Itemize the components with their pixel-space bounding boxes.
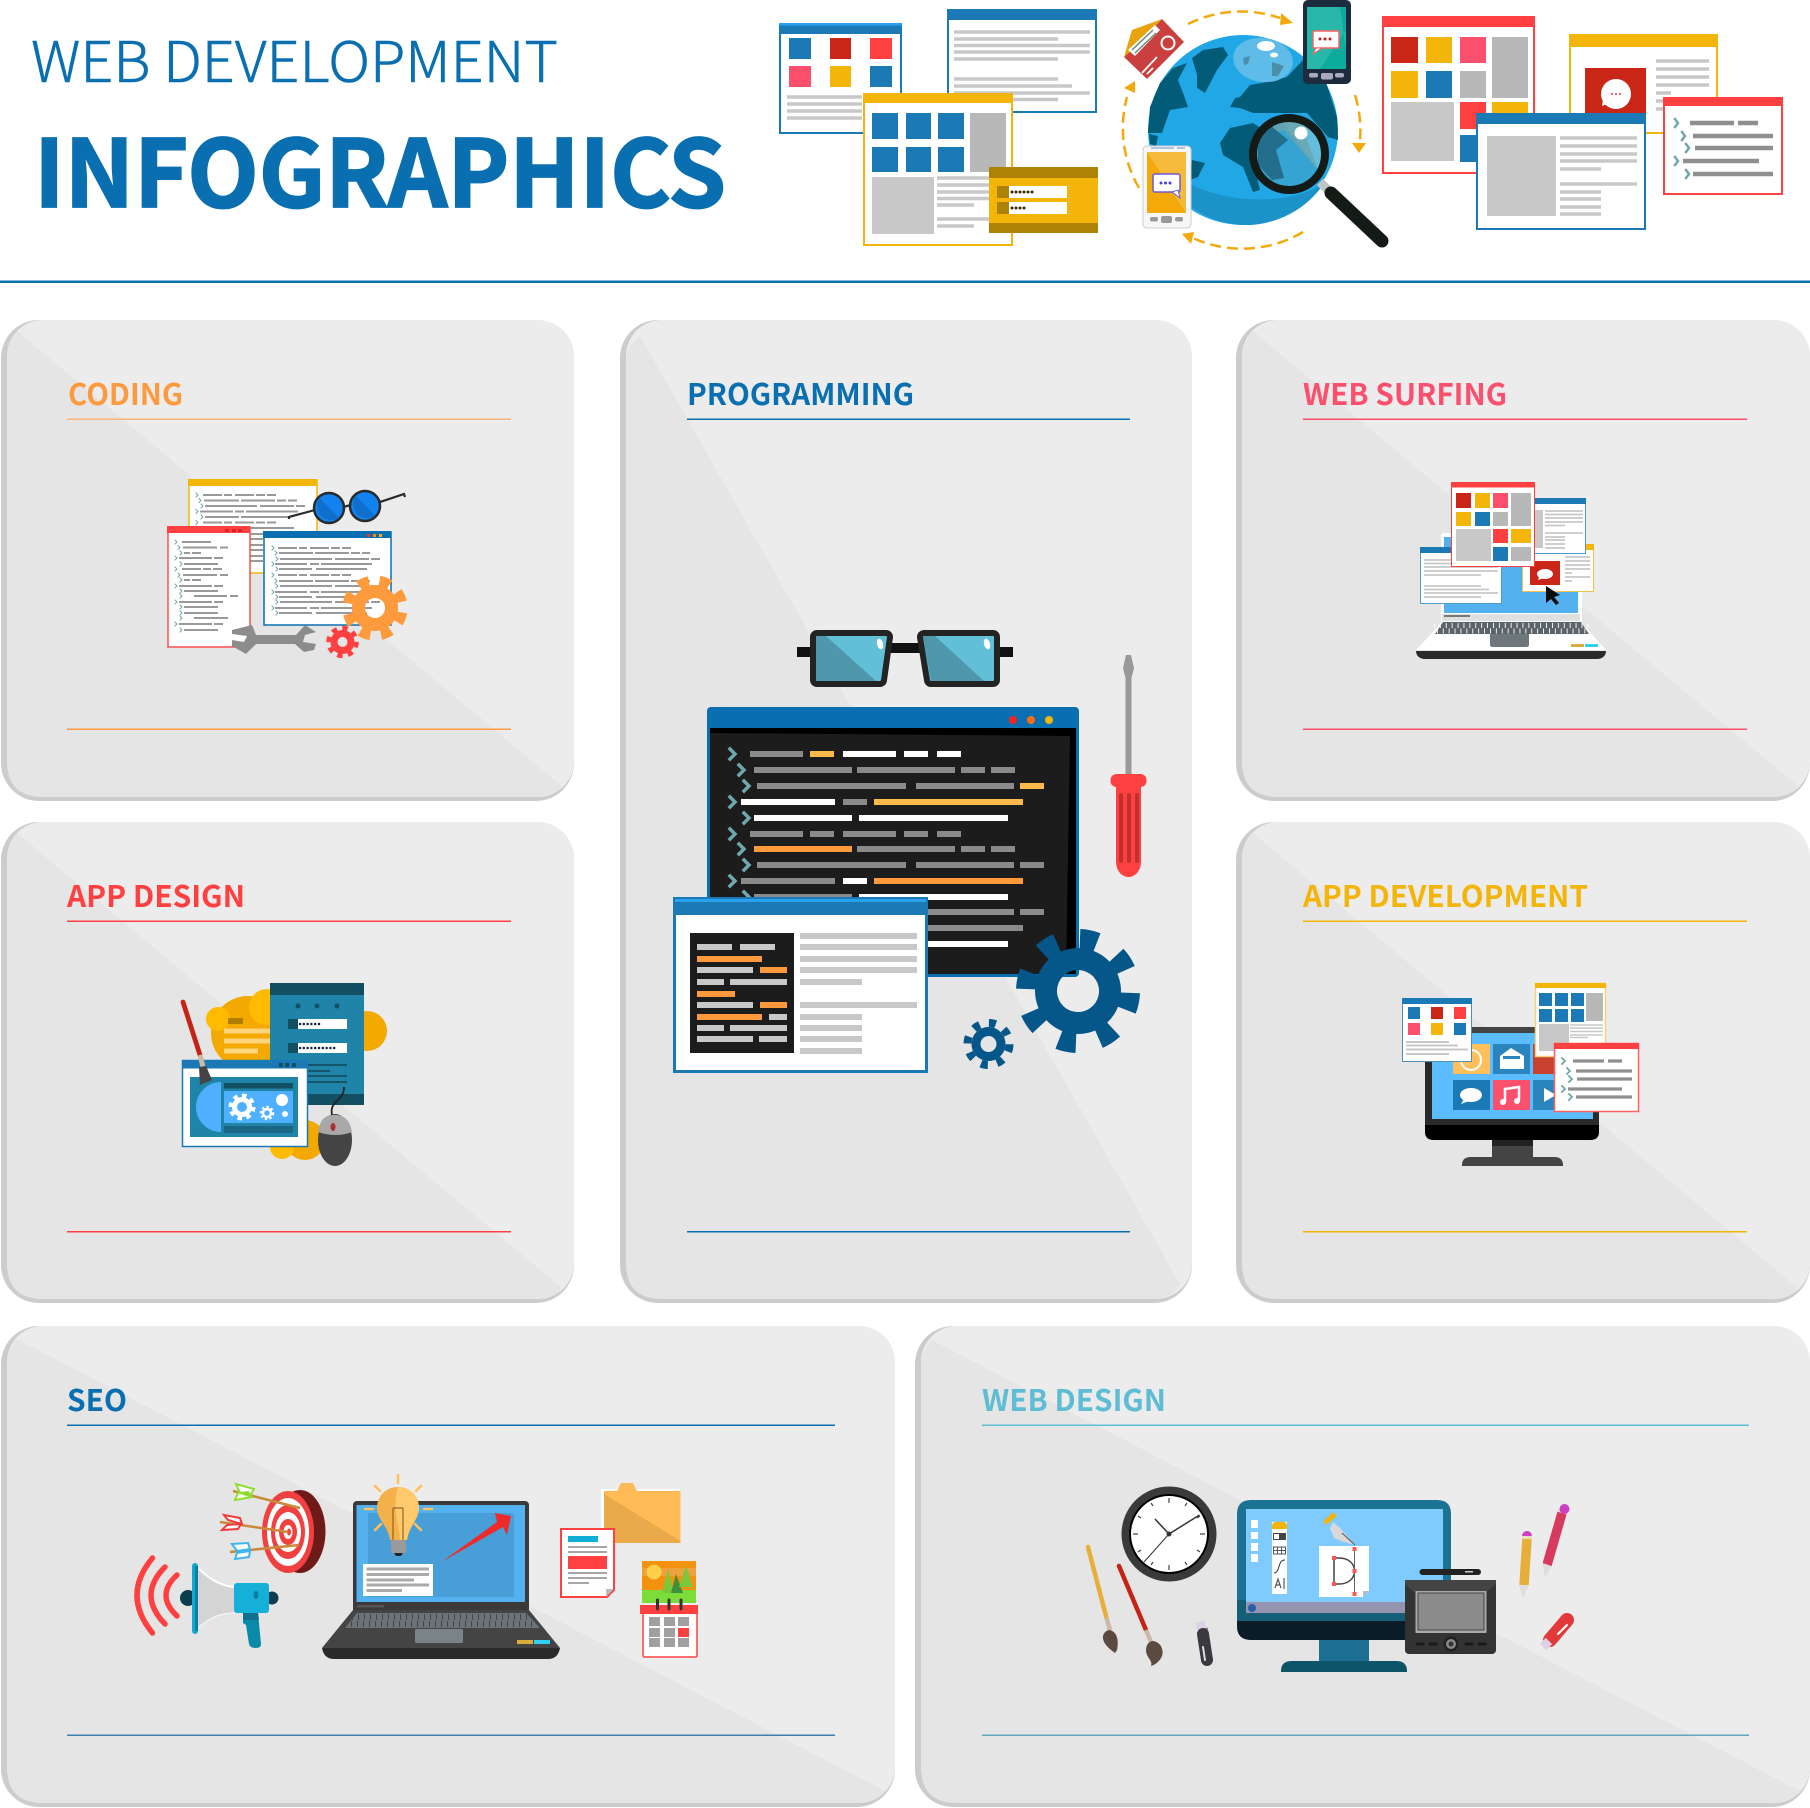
icon: red paint brush [1119,1566,1163,1666]
icon: paint brush [183,1002,212,1085]
icon: computer mouse [318,1087,352,1166]
window: red code [167,526,250,647]
icon: pink pencil [1542,1504,1570,1578]
title: web development infographics: WEB DEVELOPMENT [31,18,558,99]
drawing page [1319,1546,1369,1597]
header illustration: website windows left [779,9,1098,245]
icon: white laptop [1416,533,1606,659]
code rows gray [741,754,1044,928]
icon: design monitor [1237,1500,1451,1672]
icon: orange gear [344,577,406,639]
illustration: coding windows, glasses, wrench and gears [167,479,406,656]
dashed orbit arrows [1123,11,1366,249]
window: blue layout [1476,113,1646,229]
icon: light bulb [365,1475,432,1556]
icon: round blue glasses [289,491,405,523]
window: red grid [1451,482,1535,566]
icon: dark smartphone [1303,0,1351,84]
header divider line [0,280,1810,283]
panel: seo [1,1326,895,1807]
window: red grid [1382,16,1535,173]
window: yellow code [188,479,317,573]
icon: usb stick red [1543,1620,1567,1647]
illustration: seo tools [137,1475,698,1659]
icon: wall clock [1122,1486,1216,1582]
title: web development infographics: INFOGRAPHICS [34,99,726,234]
window: blue code [263,531,391,625]
icon: red gear [329,628,356,656]
panel: teal login screen [270,983,364,1105]
window: left text [1420,547,1502,604]
icon: megaphone with sound waves [137,1558,278,1648]
window: blue text page [947,9,1097,112]
window: settings [182,1060,308,1146]
window: yellow chat [1569,34,1718,133]
icon: graphics tablet and stylus [1405,1569,1496,1654]
heading: coding: CODING [68,370,183,414]
illustration: code editor, glasses, screwdriver and gears [673,636,1146,1072]
window: red code list [1663,97,1783,194]
panel: app design [1,822,574,1303]
panel: web surfing [1236,320,1810,801]
icon: wrench [232,625,316,654]
illustration: app design screens, brush and mouse [182,983,387,1166]
heading: seo: SEO [67,1376,127,1420]
heading: app development: APP DEVELOPMENT [1302,872,1588,916]
window: yellow layout [863,93,1013,245]
globe [1148,34,1338,225]
icon: target with arrows [220,1484,326,1573]
panel: coding [1,320,574,801]
header illustration: globe with magnifier [1123,0,1382,249]
panel: web design [915,1326,1810,1807]
code rows white [741,754,1008,944]
icon: big blue gear [1016,929,1140,1053]
icon: square glasses [797,636,1013,681]
heading: web surfing: WEB SURFING [1303,370,1507,414]
window: back blue [1532,498,1586,554]
note card on screen [363,1564,433,1596]
arrow: growth [442,1513,511,1562]
icon: mouse cursor [1546,586,1560,605]
toolbar [1272,1522,1287,1594]
window: front page with code [673,897,928,1072]
yellow blobs [206,989,387,1160]
icon: screwdriver [1110,655,1146,877]
icon: folder [601,1483,680,1543]
panel: app development [1236,822,1810,1303]
app tiles [1453,1044,1570,1110]
icon: magnifying glass [1253,118,1382,241]
heading: web design: WEB DESIGN [982,1376,1166,1420]
illustration: web design tools [1088,1486,1570,1672]
icon: email envelope [1124,19,1184,79]
window: blue grid [1402,998,1472,1062]
icon: black laptop [322,1501,560,1659]
login box yellow [989,167,1098,233]
illustration: desktop monitor with app tiles and windows [1402,983,1639,1166]
window: red code list [1554,1043,1639,1112]
heading: programming: PROGRAMMING [687,370,914,414]
window: code editor [707,707,1079,977]
icon: small blue gear [964,1019,1013,1069]
header illustration: website windows right [1382,16,1783,229]
icon: yellow pencil [1519,1531,1532,1598]
icon: desktop monitor [1425,1027,1599,1166]
icon: white smartphone [1143,146,1191,228]
heading: app design: APP DESIGN [66,872,245,916]
icon: document [561,1529,614,1597]
icon: yellow paint brush [1088,1547,1118,1653]
panel: programming [620,320,1192,1303]
window: yellow chat [1522,544,1594,592]
illustration: laptop with website windows [1416,482,1606,659]
window: yellow layout [1535,983,1606,1056]
icon: calendar with photo [640,1561,698,1657]
window: blue grid [779,23,902,133]
pen nib [1325,1514,1355,1545]
icon: usb stick black [1200,1622,1207,1660]
title: web development infographics [31,18,726,234]
code rows accent [810,754,1044,802]
